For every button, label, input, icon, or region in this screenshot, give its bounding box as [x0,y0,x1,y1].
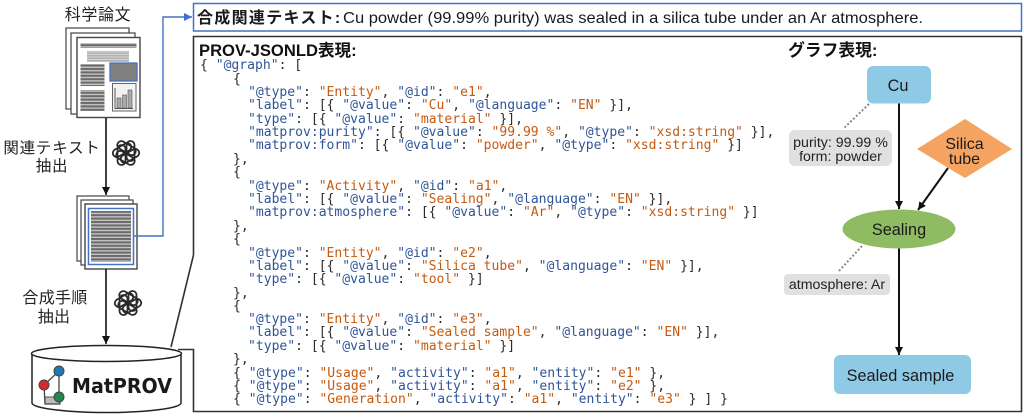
code block: PROV-JSONLD: "label": [{ "@value": "Cu", "@language": "EN" }], [248,98,633,113]
code block: PROV-JSONLD: "matprov:form": [{ "@value": "powder", "@type": "xsd:string" }] [248,138,743,153]
code block: PROV-JSONLD: "label": [{ "@value": "Silica tube", "@language": "EN" }], [248,259,704,274]
graph: provenance graph [784,66,1012,394]
node: Silica tube: tube [949,151,980,168]
label: relevant text extraction: 抽出 [36,157,68,175]
node: Cu: Cu [888,77,908,95]
code block: PROV-JSONLD: }, [233,286,249,301]
code block: PROV-JSONLD: { "@graph": [ [200,58,302,73]
dotted link: Cu attributes [843,104,869,129]
code block: PROV-JSONLD: "@type": "Entity", "@id": "e2", [248,246,492,261]
attributes: Cu: purity: 99.99 % [793,135,888,151]
heading: PROV-JSONLD representation: PROV-JSONLD表現: [199,41,357,60]
connector: relevant text to synthesis text box [134,17,192,236]
label: synthesis procedure extraction: 合成手順 [22,290,88,307]
code block: PROV-JSONLD: { [233,232,241,247]
code block: PROV-JSONLD: "matprov:atmosphere": [{ "@value": "Ar", "@type": "xsd:string" }] [248,205,759,220]
code block: PROV-JSONLD: }, [233,352,249,367]
code block: PROV-JSONLD: { [233,299,241,314]
dotted link: Sealing attributes [838,246,862,272]
heading: graph representation: グラフ表現: [788,40,878,60]
panel: main representation callout outline [171,36,1022,412]
node: Sealed sample: Sealed sample [847,367,954,385]
icon: provenance graph [39,366,64,404]
database name: MatPROV [72,374,172,398]
code block: PROV-JSONLD: "label": [{ "@value": "Sealed sample", "@language": "EN" }], [248,325,719,340]
attributes: Cu [789,130,892,166]
icon: stack of scientific papers [66,28,140,118]
node: Sealed sample [834,355,971,394]
code block: PROV-JSONLD: }, [233,219,249,234]
code block: PROV-JSONLD: "type": [{ "@value": "material" }], [248,112,523,127]
arrow: relevant text to database [105,269,107,344]
code block: PROV-JSONLD: "@type": "Entity", "@id": "e1", [248,85,492,100]
code block: PROV-JSONLD: "label": [{ "@value": "Sealing", "@language": "EN" }], [248,192,672,207]
synthesis text label and sentence: 合成関連テキスト: [197,8,342,27]
panel: synthesis related text [194,4,1022,31]
arrow: Silica tube to Sealing [918,168,948,210]
node: Cu [867,66,931,104]
arrow: Cu to Sealing [898,103,900,209]
code block: PROV-JSONLD: "type": [{ "@value": "material" }] [248,339,515,354]
code block: PROV-JSONLD: "@type": "Activity", "@id": "a1", [248,179,507,194]
code block: PROV-JSONLD: "matprov:purity": [{ "@value": "99.99 %", "@type": "xsd:string" }], [248,125,774,140]
arrow: Sealing to Sealed sample [898,248,900,355]
code block: PROV-JSONLD: { "@type": "Usage", "activity": "a1", "entity": "e1" }, [233,366,665,381]
icon: AI logo top [111,140,141,166]
node: Sealing [842,210,956,248]
attributes: Sealing: atmosphere: Ar [789,277,885,293]
attributes: Sealing [784,274,890,295]
code block: PROV-JSONLD: "@type": "Entity", "@id": "e3", [248,312,492,327]
icon: AI logo bottom [113,290,143,316]
synthesis text label and sentence: Cu powder (99.99% purity) was sealed in a silica tube under an Ar atmosphere. [343,10,923,27]
heading: scientific papers: 科学論文 [65,6,131,24]
node: Silica tube: Silica [945,136,984,153]
code block: PROV-JSONLD: { [233,72,241,87]
icon: stack of relevant text pages [77,196,137,269]
node: Silica tube [917,119,1012,178]
code block: PROV-JSONLD: }, [233,152,249,167]
label: relevant text extraction: 関連テキスト [3,140,101,157]
node: Sealing: Sealing [872,221,926,239]
database: MatPROV cylinder [32,346,182,412]
code block: PROV-JSONLD: "type": [{ "@value": "tool" }] [248,272,484,287]
label: synthesis procedure extraction: 抽出 [38,308,70,326]
code block: PROV-JSONLD: { [233,165,241,180]
arrow: paper to relevant text [105,118,107,195]
code block: PROV-JSONLD: { "@type": "Usage", "activity": "a1", "entity": "e2" }, [233,379,665,394]
code block: PROV-JSONLD [200,58,774,407]
code block: PROV-JSONLD: { "@type": "Generation", "activity": "a1", "entity": "e3" } ] } [233,392,728,407]
attributes: Cu: form: powder [799,149,882,165]
